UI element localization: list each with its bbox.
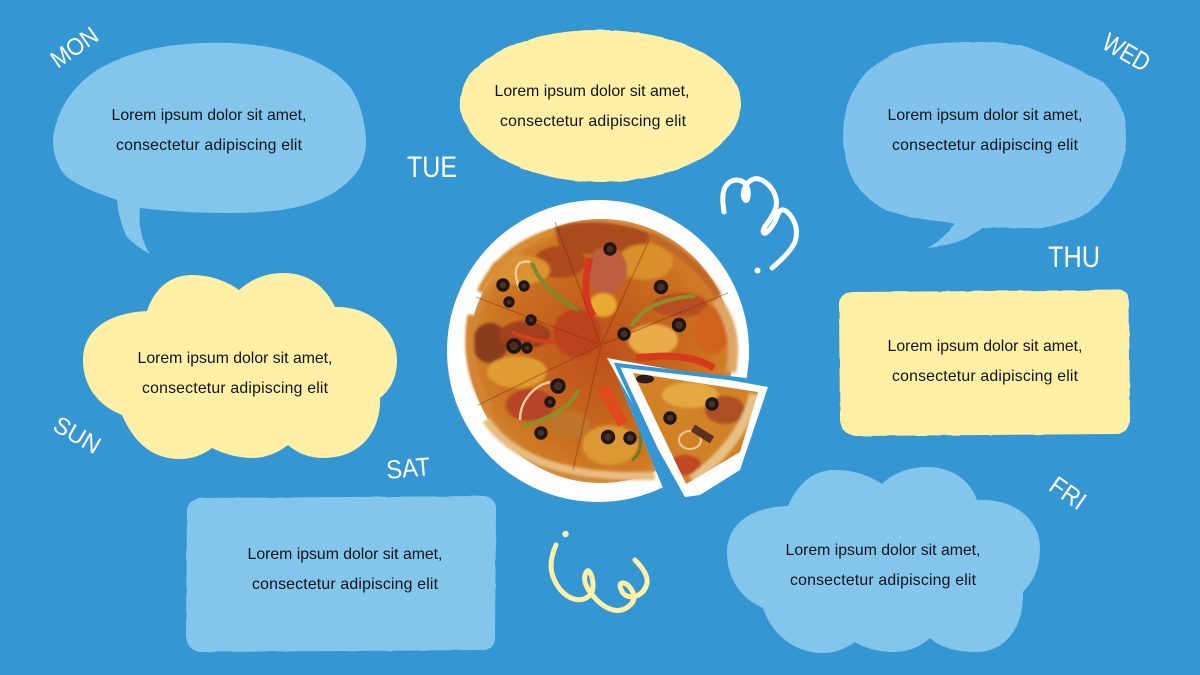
panel: Tuesday oval: [460, 30, 741, 182]
panel: Saturday rectangle: consectetur adipiscing elit: [252, 576, 439, 593]
peppers: [586, 258, 594, 316]
panel: Wednesday speech bubble: consectetur adipiscing elit: [892, 137, 1079, 154]
slice cuts: [476, 222, 728, 470]
icon: yellow squiggle: [551, 532, 647, 611]
blue gap stripe: [617, 365, 746, 484]
panel: Friday cloud: consectetur adipiscing elit: [790, 572, 977, 589]
label: WED: WED: [1097, 27, 1156, 78]
olives: [498, 244, 684, 443]
image: pizza with slice cut out: [447, 200, 768, 502]
label: FRI: FRI: [1044, 471, 1091, 516]
panel: Sunday cloud: consectetur adipiscing elit: [142, 380, 329, 397]
panel: Tuesday oval: Lorem ipsum dolor sit amet,: [495, 83, 689, 100]
icon: white squiggle: [723, 179, 796, 272]
label: SUN: SUN: [48, 411, 105, 460]
label: MON: MON: [46, 22, 104, 74]
white slice backing: [607, 358, 768, 497]
panel: Tuesday oval: consectetur adipiscing elit: [500, 113, 687, 130]
panel: Saturday rectangle: Lorem ipsum dolor sit amet,: [248, 546, 442, 563]
label: SAT: SAT: [385, 451, 432, 485]
panel: Thursday rectangle: consectetur adipiscing elit: [892, 368, 1079, 385]
panel: Thursday rectangle: Lorem ipsum dolor sit amet,: [888, 338, 1082, 355]
panel: Sunday cloud: Lorem ipsum dolor sit amet,: [138, 350, 332, 367]
panel: Sunday cloud: [83, 273, 397, 459]
panel: Friday cloud: [727, 467, 1040, 653]
panel: Saturday rectangle: [186, 496, 496, 652]
label: TUE: TUE: [407, 151, 457, 184]
panel: Friday cloud: Lorem ipsum dolor sit amet,: [786, 542, 980, 559]
pizza body: [469, 219, 733, 483]
panel: Monday speech bubble: [53, 43, 366, 254]
panel: Wednesday speech bubble: Lorem ipsum dolor sit amet,: [888, 107, 1082, 124]
panel: Monday speech bubble: Lorem ipsum dolor sit amet,: [112, 107, 306, 124]
panel: Wednesday speech bubble: [843, 42, 1126, 248]
panel: Monday speech bubble: consectetur adipiscing elit: [116, 137, 303, 154]
white cutout behind pizza: [447, 200, 749, 502]
label: THU: THU: [1048, 241, 1100, 274]
pizza slice: [633, 373, 758, 484]
panel: Thursday rectangle: [839, 290, 1130, 436]
